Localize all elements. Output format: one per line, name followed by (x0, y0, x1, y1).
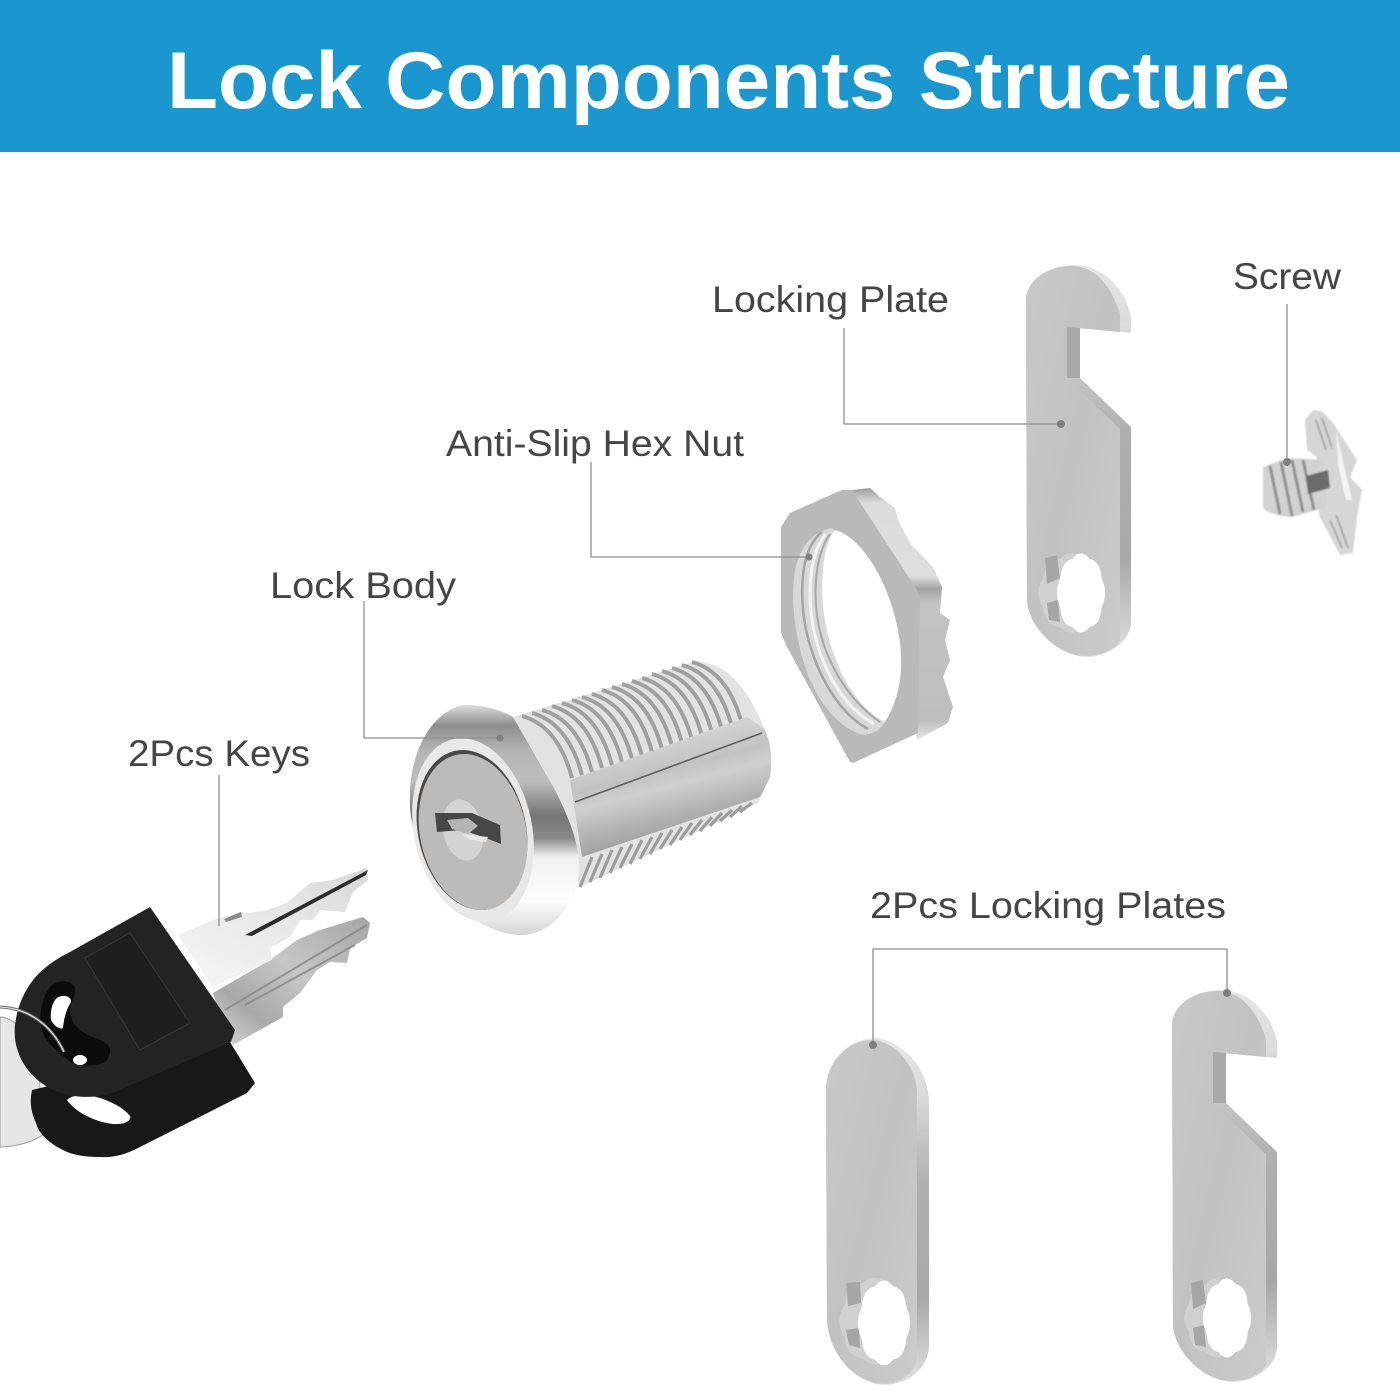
flat side (570, 717, 771, 857)
lower black key head (31, 1042, 255, 1157)
label: Lock Body: Lock Body (270, 565, 457, 606)
key ring (0, 1007, 64, 1052)
leader line: 2Pcs Keys (218, 775, 220, 926)
label: Screw: Screw (1233, 256, 1341, 297)
icon: key tag behind keys (0, 1017, 47, 1147)
nut thread (793, 528, 885, 735)
upper threads (522, 662, 742, 778)
leader line: Lock Body (364, 601, 504, 742)
leader line: Locking Plate (844, 328, 1065, 428)
label: Anti-Slip Hex Nut: Anti-Slip Hex Nut (446, 423, 745, 464)
hex nut (781, 488, 953, 763)
key head hole (40, 981, 110, 1065)
key face (405, 744, 541, 920)
threaded cylinder base (513, 662, 771, 887)
nut knurled side (852, 488, 953, 740)
locking plate with hook (bottom right) (1172, 990, 1277, 1382)
leader line: Anti-Slip Hex Nut (591, 462, 812, 560)
front rim (396, 727, 550, 933)
nut hole (822, 530, 901, 722)
title: Lock Components Structure (167, 36, 1290, 126)
flange (410, 705, 579, 935)
nut face (781, 490, 920, 763)
locking plate straight (bottom left) (826, 1038, 929, 1385)
lower threads (580, 803, 752, 887)
title band (0, 0, 1400, 152)
lock body (396, 662, 771, 935)
leader line: Screw (1283, 304, 1291, 466)
screw head (1305, 410, 1362, 555)
lower key blade (213, 917, 370, 1045)
keyhole (435, 796, 501, 864)
label: Locking Plate: Locking Plate (712, 279, 949, 320)
key head label recess (85, 933, 190, 1050)
label: 2Pcs Keys: 2Pcs Keys (128, 733, 310, 774)
screw thread (1263, 458, 1327, 517)
upper key blade (178, 868, 368, 987)
label: 2Pcs Locking Plates: 2Pcs Locking Plates (870, 885, 1226, 926)
leader line: 2Pcs Locking Plates (869, 949, 1231, 1049)
upper key groove (245, 870, 368, 936)
upper black key head (15, 907, 235, 1097)
locking plate with hook (upper) (1026, 265, 1131, 657)
icon: two keys (0, 868, 370, 1157)
screw (1263, 410, 1362, 555)
